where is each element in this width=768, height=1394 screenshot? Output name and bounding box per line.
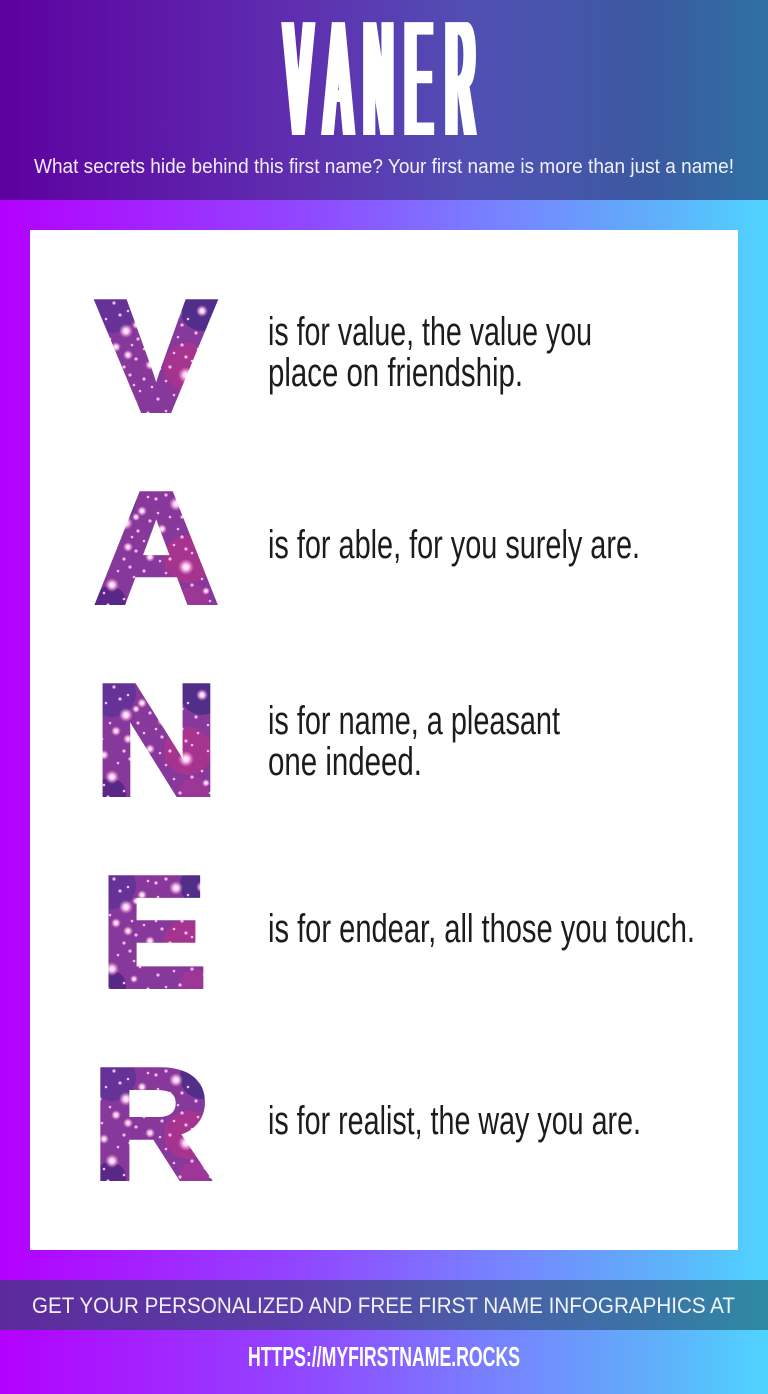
row R <box>92 1036 641 1212</box>
white content panel <box>30 230 738 1250</box>
description V: is for value, the value you <box>268 310 592 354</box>
description N: is for name, a pleasant <box>268 699 560 743</box>
letter N: N <box>94 652 219 828</box>
letter A: A <box>94 460 218 636</box>
website url: HTTPS://MYFIRSTNAME.ROCKS <box>248 1341 520 1372</box>
row N <box>94 652 560 828</box>
description N <box>268 699 560 784</box>
row V <box>96 268 592 444</box>
row A <box>94 460 640 636</box>
letter R: R <box>92 1036 211 1212</box>
description V <box>268 310 592 395</box>
description V: place on friendship. <box>268 351 523 395</box>
letter E: E <box>100 844 207 1020</box>
header band <box>0 0 768 200</box>
row E <box>100 844 695 1020</box>
description N: one indeed. <box>268 740 422 784</box>
footer band <box>0 1280 768 1330</box>
title <box>286 0 474 171</box>
letter V: V <box>96 268 216 444</box>
subtitle: What secrets hide behind this first name? Your first name is more than just a name! <box>34 155 734 178</box>
footer call to action: GET YOUR PERSONALIZED AND FREE FIRST NAME INFOGRAPHICS AT <box>32 1293 735 1318</box>
